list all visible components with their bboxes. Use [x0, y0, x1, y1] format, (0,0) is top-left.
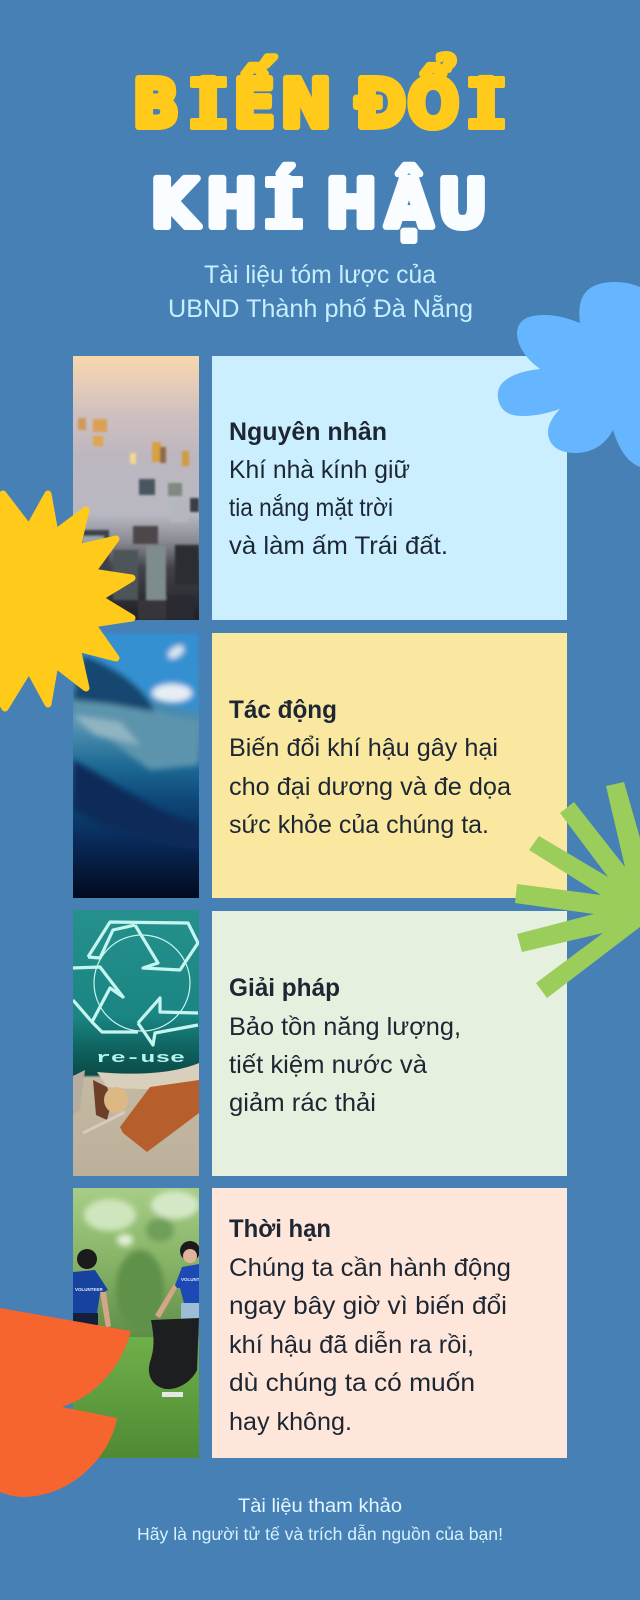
volunteer left: VOLUNTEER — [75, 1287, 104, 1292]
panel text: Giải pháp — [229, 974, 340, 1002]
volunteer right — [155, 1241, 199, 1319]
panel text: hay không. — [229, 1408, 352, 1436]
panel: Tác động — [212, 633, 567, 898]
panel: Nguyên nhân — [212, 356, 567, 620]
rubbish bag — [149, 1318, 199, 1389]
footer note: Hãy là người tử tế và trích dẫn nguồn của bạn! — [137, 1523, 503, 1544]
panel text: Biến đổi khí hậu gây hại — [229, 734, 498, 762]
panel text — [229, 974, 461, 1117]
photo: city in fog — [73, 356, 199, 620]
decoration: orange pac-man — [0, 1308, 131, 1497]
panel text: giảm rác thải — [229, 1089, 376, 1117]
decoration: green rays — [515, 782, 640, 998]
title line: Biến đổi: BIẾN ĐỔI — [133, 53, 497, 142]
photo: recycle re-use bag and leaves — [73, 910, 199, 1176]
panel background — [212, 1188, 567, 1458]
panel: Giải pháp — [212, 911, 567, 1176]
panel text: Khí nhà kính giữ — [229, 456, 410, 484]
panel text: sức khỏe của chúng ta. — [229, 811, 489, 839]
panel text: tiết kiệm nước và — [229, 1051, 427, 1079]
panel: Thời hạn — [212, 1188, 567, 1458]
panel text: tia nắng mặt trời — [229, 493, 393, 522]
panel text: khí hậu đã diễn ra rồi, — [229, 1330, 474, 1359]
subtitle: Tài liệu tóm lược của — [204, 261, 436, 289]
panel text: Thời hạn — [229, 1215, 331, 1243]
subtitle: UBND Thành phố Đà Nẵng — [168, 294, 473, 323]
panel text: Chúng ta cần hành động — [229, 1254, 511, 1282]
decoration: blue flower — [498, 282, 640, 467]
photo: ocean wave — [73, 633, 199, 898]
volunteer right: VOLUNTEER — [181, 1277, 210, 1282]
panel text: dù chúng ta có muốn — [229, 1369, 475, 1397]
panel text: Bảo tồn năng lượng, — [229, 1013, 461, 1041]
volunteer left — [73, 1249, 111, 1328]
panel text — [229, 418, 448, 560]
leaves — [73, 1063, 199, 1152]
title — [133, 53, 505, 242]
panel background — [212, 633, 567, 898]
footer — [137, 1495, 503, 1544]
panel text — [229, 1215, 511, 1436]
text: re-use: re-use — [96, 1050, 185, 1067]
panel text: Tác động — [229, 696, 337, 724]
decoration: yellow sun burst — [0, 494, 132, 708]
panel text: Nguyên nhân — [229, 418, 387, 446]
title line: Khí hậu: KHÍ HẬU — [151, 163, 487, 242]
photo: volunteers collecting rubbish — [73, 1188, 210, 1458]
panel text: cho đại dương và đe dọa — [229, 773, 511, 801]
panel text: và làm ấm Trái đất. — [229, 532, 448, 560]
panel text: ngay bây giờ vì biến đổi — [229, 1292, 507, 1320]
recycle symbol — [73, 922, 198, 1045]
panel background — [212, 911, 567, 1176]
panel text — [229, 696, 511, 839]
subtitle — [168, 261, 473, 323]
panel background — [212, 356, 567, 620]
footer heading: Tài liệu tham khảo — [238, 1495, 402, 1517]
